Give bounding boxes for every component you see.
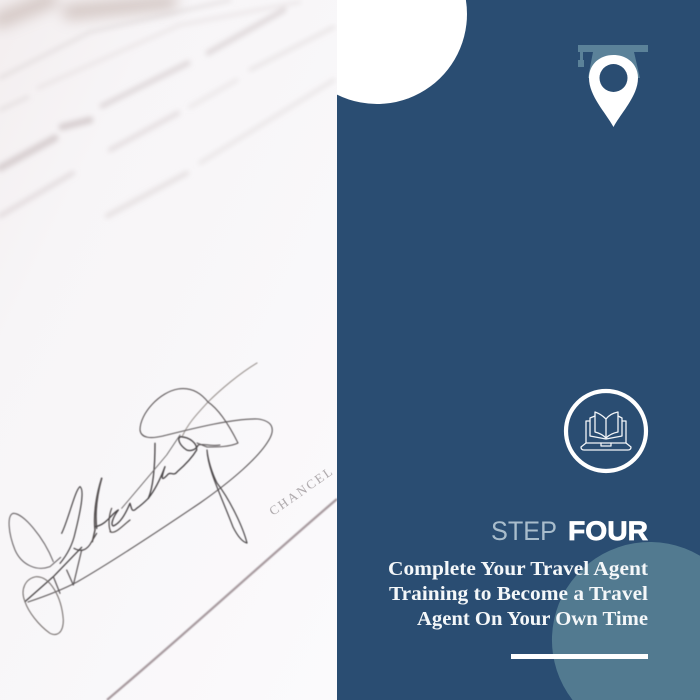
text block: step title: Agent On Your Own Time	[417, 608, 648, 630]
blurred document text	[0, 0, 334, 216]
initial strokes, coordinates traced from crop	[9, 478, 130, 635]
decorative white circle	[337, 0, 467, 104]
text block: step title	[388, 558, 648, 630]
underline bar	[511, 654, 648, 659]
text block: step title: Complete Your Travel Agent	[388, 558, 648, 580]
panel: blue background	[337, 0, 700, 700]
descending blade stroke	[207, 450, 247, 543]
heading: step number: STEP	[491, 516, 557, 546]
text block: step title: Training to Become a Travel	[389, 583, 648, 605]
heading: step number: FOUR	[568, 516, 648, 546]
graduation cap	[578, 45, 648, 78]
long flourish and loop	[182, 363, 257, 437]
heading: step number	[491, 516, 648, 546]
decorative teal circle	[552, 542, 700, 700]
icon: graduation cap and location pin	[578, 45, 648, 127]
photo: signed document	[0, 0, 337, 700]
surname scribble, coordinates traced from crop	[95, 435, 220, 528]
location pin	[589, 55, 638, 127]
printed name on document: CHANCEL	[266, 463, 336, 518]
paper edge line	[107, 499, 337, 700]
signature	[9, 363, 272, 635]
icon: open book on laptop	[566, 391, 646, 471]
